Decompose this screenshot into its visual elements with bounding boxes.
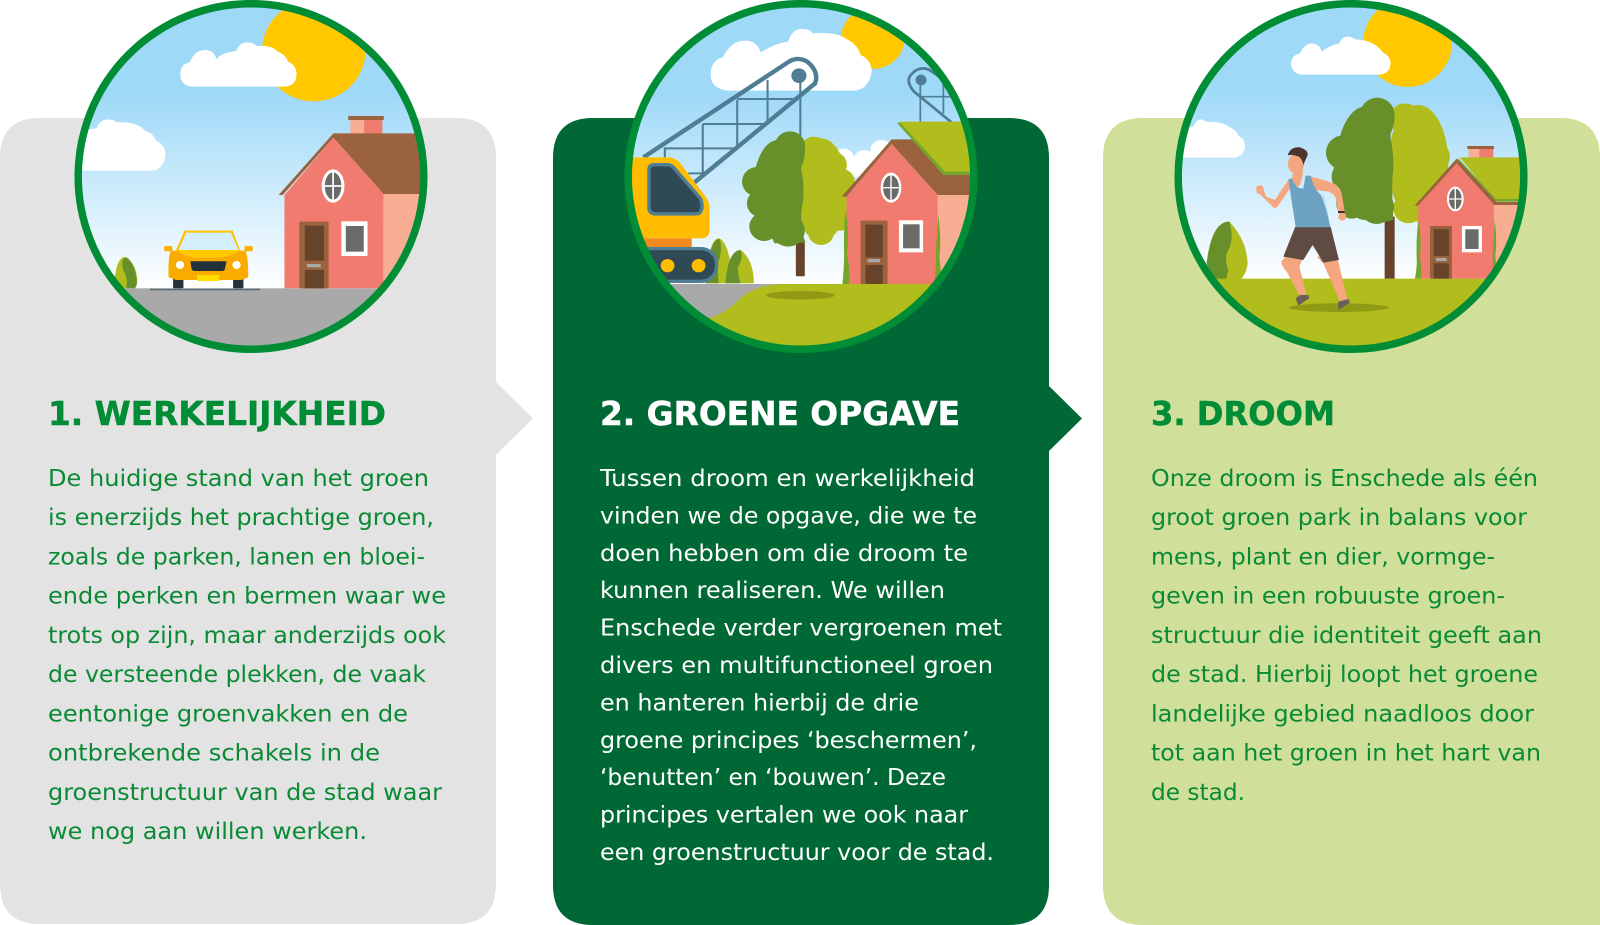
body text 3: structuur die identiteit geeft aan (1151, 623, 1542, 649)
body text 2: doen hebben om die droom te (600, 541, 968, 567)
heading 3: 3. DROOM (1151, 394, 1335, 433)
body text 3: de stad. (1151, 780, 1245, 806)
panel 1 background with arrow (0, 118, 533, 924)
body text 2: divers en multifunctioneel groen (600, 653, 993, 679)
house with green roof (842, 122, 981, 284)
body text 1: De huidige stand van het groen (48, 466, 429, 492)
cloud behind house (838, 140, 890, 177)
tree (1326, 98, 1450, 279)
bush (1207, 222, 1248, 283)
panel 2 background with arrow (553, 118, 1082, 925)
road (124, 288, 378, 346)
body text 3: landelijke gebied naadloos door (1151, 702, 1535, 728)
illustration 2: crane and tree (619, 0, 985, 355)
cloud (1291, 37, 1391, 75)
body text 3: geven in een robuuste groen- (1151, 584, 1505, 610)
body text 3 (1151, 466, 1542, 806)
body text 1: zoals de parken, lanen en bloei- (48, 544, 425, 570)
house with green roof (1415, 146, 1531, 279)
illustration 1: car and house (69, 0, 448, 355)
bush (114, 257, 137, 288)
body text 1: trots op zijn, maar anderzijds ook (48, 623, 447, 649)
body text 2: vinden we de opgave, die we te (600, 503, 977, 529)
heading 1: 1. WERKELIJKHEID (48, 394, 386, 433)
heading 2: 2. GROENE OPGAVE (600, 394, 960, 433)
body text 3: tot aan het groen in het hart van (1151, 740, 1541, 766)
sun (1363, 10, 1452, 87)
panel 3: droom (1103, 0, 1600, 925)
body text 2: een groenstructuur voor de stad. (600, 840, 994, 866)
cloud (180, 42, 297, 87)
body text 2: Enschede verder vergroenen met (600, 616, 1002, 642)
body text 3: de stad. Hierbij loopt het groene (1151, 662, 1538, 688)
circle border 2 (628, 4, 974, 349)
sun (262, 0, 365, 101)
grass (1216, 278, 1486, 346)
car (150, 231, 260, 290)
sun (841, 15, 904, 69)
panel 2: groene opgave (553, 0, 1082, 925)
panel 3 background (1103, 118, 1600, 925)
runner (1256, 147, 1350, 310)
cloud (1180, 119, 1245, 158)
body text 3: mens, plant en dier, vormge- (1151, 544, 1495, 570)
body text 1 (48, 466, 447, 845)
illustration 3: runner in park (1170, 0, 1533, 355)
panel 1: werkelijkheid (0, 0, 533, 924)
body text 1: groenstructuur van de stad waar (48, 780, 443, 806)
body text 2: ‘benutten’ en ‘bouwen’. Deze (600, 765, 946, 791)
house (279, 116, 428, 288)
body text 2: groene principes ‘beschermen’, (600, 728, 977, 754)
body text 1: ende perken en bermen waar we (48, 584, 446, 610)
excavator (619, 157, 717, 281)
bushes (706, 238, 754, 283)
cloud (711, 29, 872, 91)
body text 2: principes vertalen we ook naar (600, 803, 969, 829)
body text 1: is enerzijds het prachtige groen, (48, 505, 434, 531)
body text 1: de versteende plekken, de vaak (48, 662, 427, 688)
body text 1: we nog aan willen werken. (48, 819, 367, 845)
body text 2: kunnen realiseren. We willen (600, 578, 945, 604)
body text 1: eentonige groenvakken en de (48, 702, 408, 728)
tree (742, 131, 855, 276)
body text 1: ontbrekende schakels in de (48, 740, 380, 766)
crane boom (643, 59, 816, 183)
body text 2 (599, 466, 1002, 866)
body text 3: Onze droom is Enschede als één (1151, 466, 1538, 492)
road and grass (670, 284, 932, 346)
body text 2: Tussen droom en werkelijkheid (599, 466, 975, 492)
circle border 1 (78, 4, 424, 349)
second crane (907, 67, 953, 122)
circle border 3 (1178, 4, 1524, 349)
cloud (79, 119, 166, 171)
body text 2: en hanteren hierbij de drie (600, 690, 919, 716)
body text 3: groot groen park in balans voor (1151, 505, 1528, 531)
